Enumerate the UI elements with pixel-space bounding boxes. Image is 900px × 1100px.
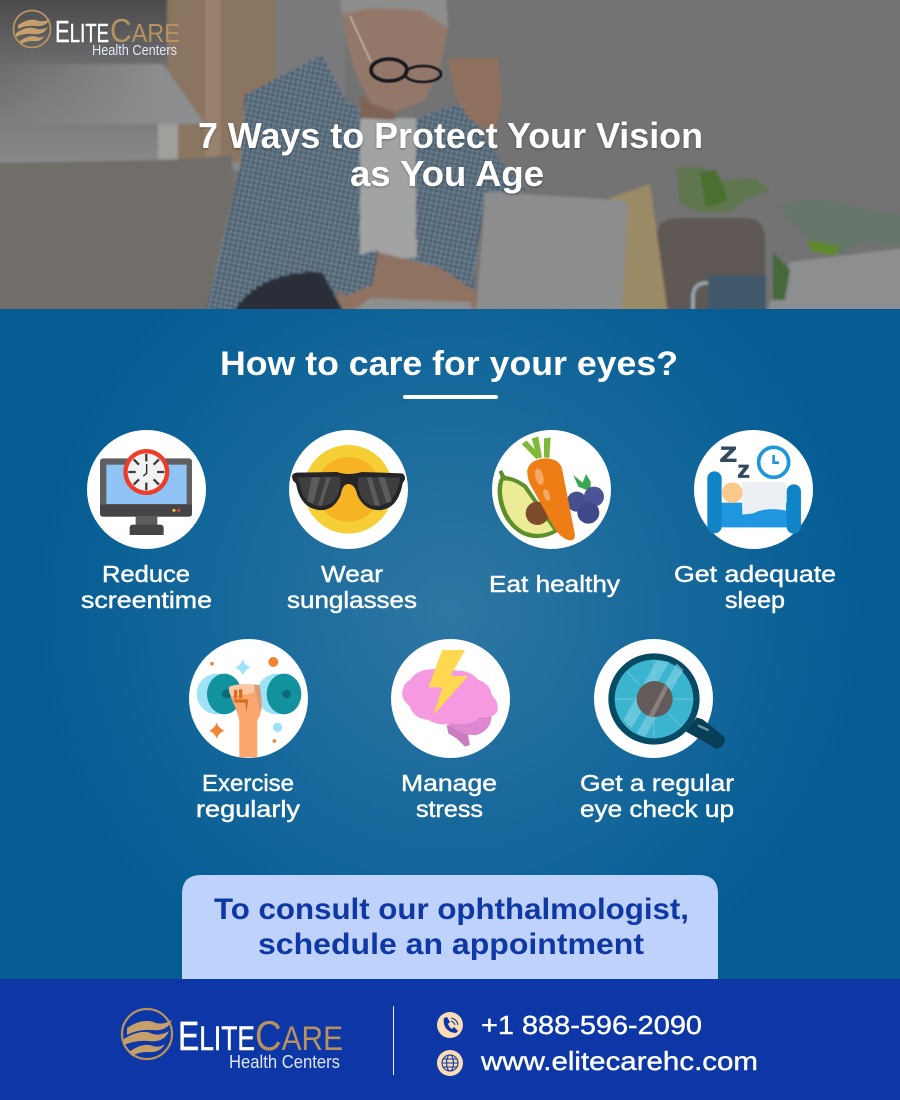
label: eye check up	[580, 796, 734, 822]
label: screentime	[81, 587, 212, 613]
callout: consult ophthalmologist	[182, 875, 718, 980]
logo: footer: Health Centers	[229, 1052, 340, 1072]
label	[401, 770, 497, 822]
icon: avocado, carrot, blueberries	[498, 437, 604, 540]
icon: sunglasses on sun	[292, 445, 405, 534]
item: eat healthy	[489, 430, 621, 597]
callout: consult ophthalmologist: schedule an appointment	[258, 928, 644, 961]
label	[287, 561, 417, 613]
label: Manage	[401, 770, 497, 796]
item: get adequate sleep	[674, 430, 836, 613]
label: sunglasses	[287, 587, 417, 613]
logo: footer	[122, 1009, 343, 1072]
icon: monitor with clock	[100, 449, 192, 535]
logo: top left	[14, 10, 180, 59]
heading: how to care: How to care for your eyes?	[220, 345, 678, 383]
website: www.elitecarehc.com	[480, 1046, 758, 1076]
logo: footer: CARE	[255, 1012, 343, 1059]
label	[196, 770, 301, 822]
label: Exercise	[202, 770, 294, 796]
label: Get adequate	[674, 561, 836, 587]
heading: how to care	[220, 345, 678, 399]
logo: top left: Health Centers	[92, 42, 177, 59]
icon: brain with lightning	[402, 651, 498, 747]
title: 7 Ways to Protect Your Vision	[198, 115, 703, 156]
icon: phone	[437, 1012, 463, 1038]
label: Eat healthy	[489, 571, 621, 597]
hero photo: man with glasses at laptop	[0, 0, 900, 315]
label	[674, 561, 836, 613]
divider	[393, 1006, 394, 1075]
item: get a regular eye check up	[580, 639, 734, 822]
item: wear sunglasses	[287, 430, 417, 613]
panel: blue care section background	[0, 309, 900, 980]
label	[81, 561, 212, 613]
item: manage stress	[391, 639, 510, 822]
icon: magnifier over eye	[608, 653, 725, 749]
logo: top left: ELITE	[55, 14, 109, 49]
callout: consult ophthalmologist: To consult our ophthalmologist,	[214, 893, 689, 926]
logo: top left: CARE	[110, 12, 180, 49]
icon: bed with clock: Z	[720, 442, 737, 467]
item: exercise regularly	[189, 639, 308, 822]
label: Wear	[321, 561, 383, 587]
icon: globe	[437, 1050, 463, 1076]
logo: footer: ELITE	[178, 1013, 255, 1059]
title	[198, 115, 703, 194]
icon: hand with dumbbell	[197, 657, 301, 757]
label: stress	[416, 796, 483, 822]
item: reduce screentime	[81, 430, 212, 613]
label	[580, 770, 734, 822]
label: sleep	[725, 587, 785, 613]
label: regularly	[196, 796, 301, 822]
label: Get a regular	[580, 770, 734, 796]
icon: bed with clock: z	[737, 456, 750, 482]
phone number: +1 888-596-2090	[481, 1010, 702, 1040]
icon: bed with clock	[707, 442, 801, 534]
panel: footer	[0, 979, 900, 1100]
label: Reduce	[102, 561, 190, 587]
title: as You Age	[350, 153, 544, 194]
